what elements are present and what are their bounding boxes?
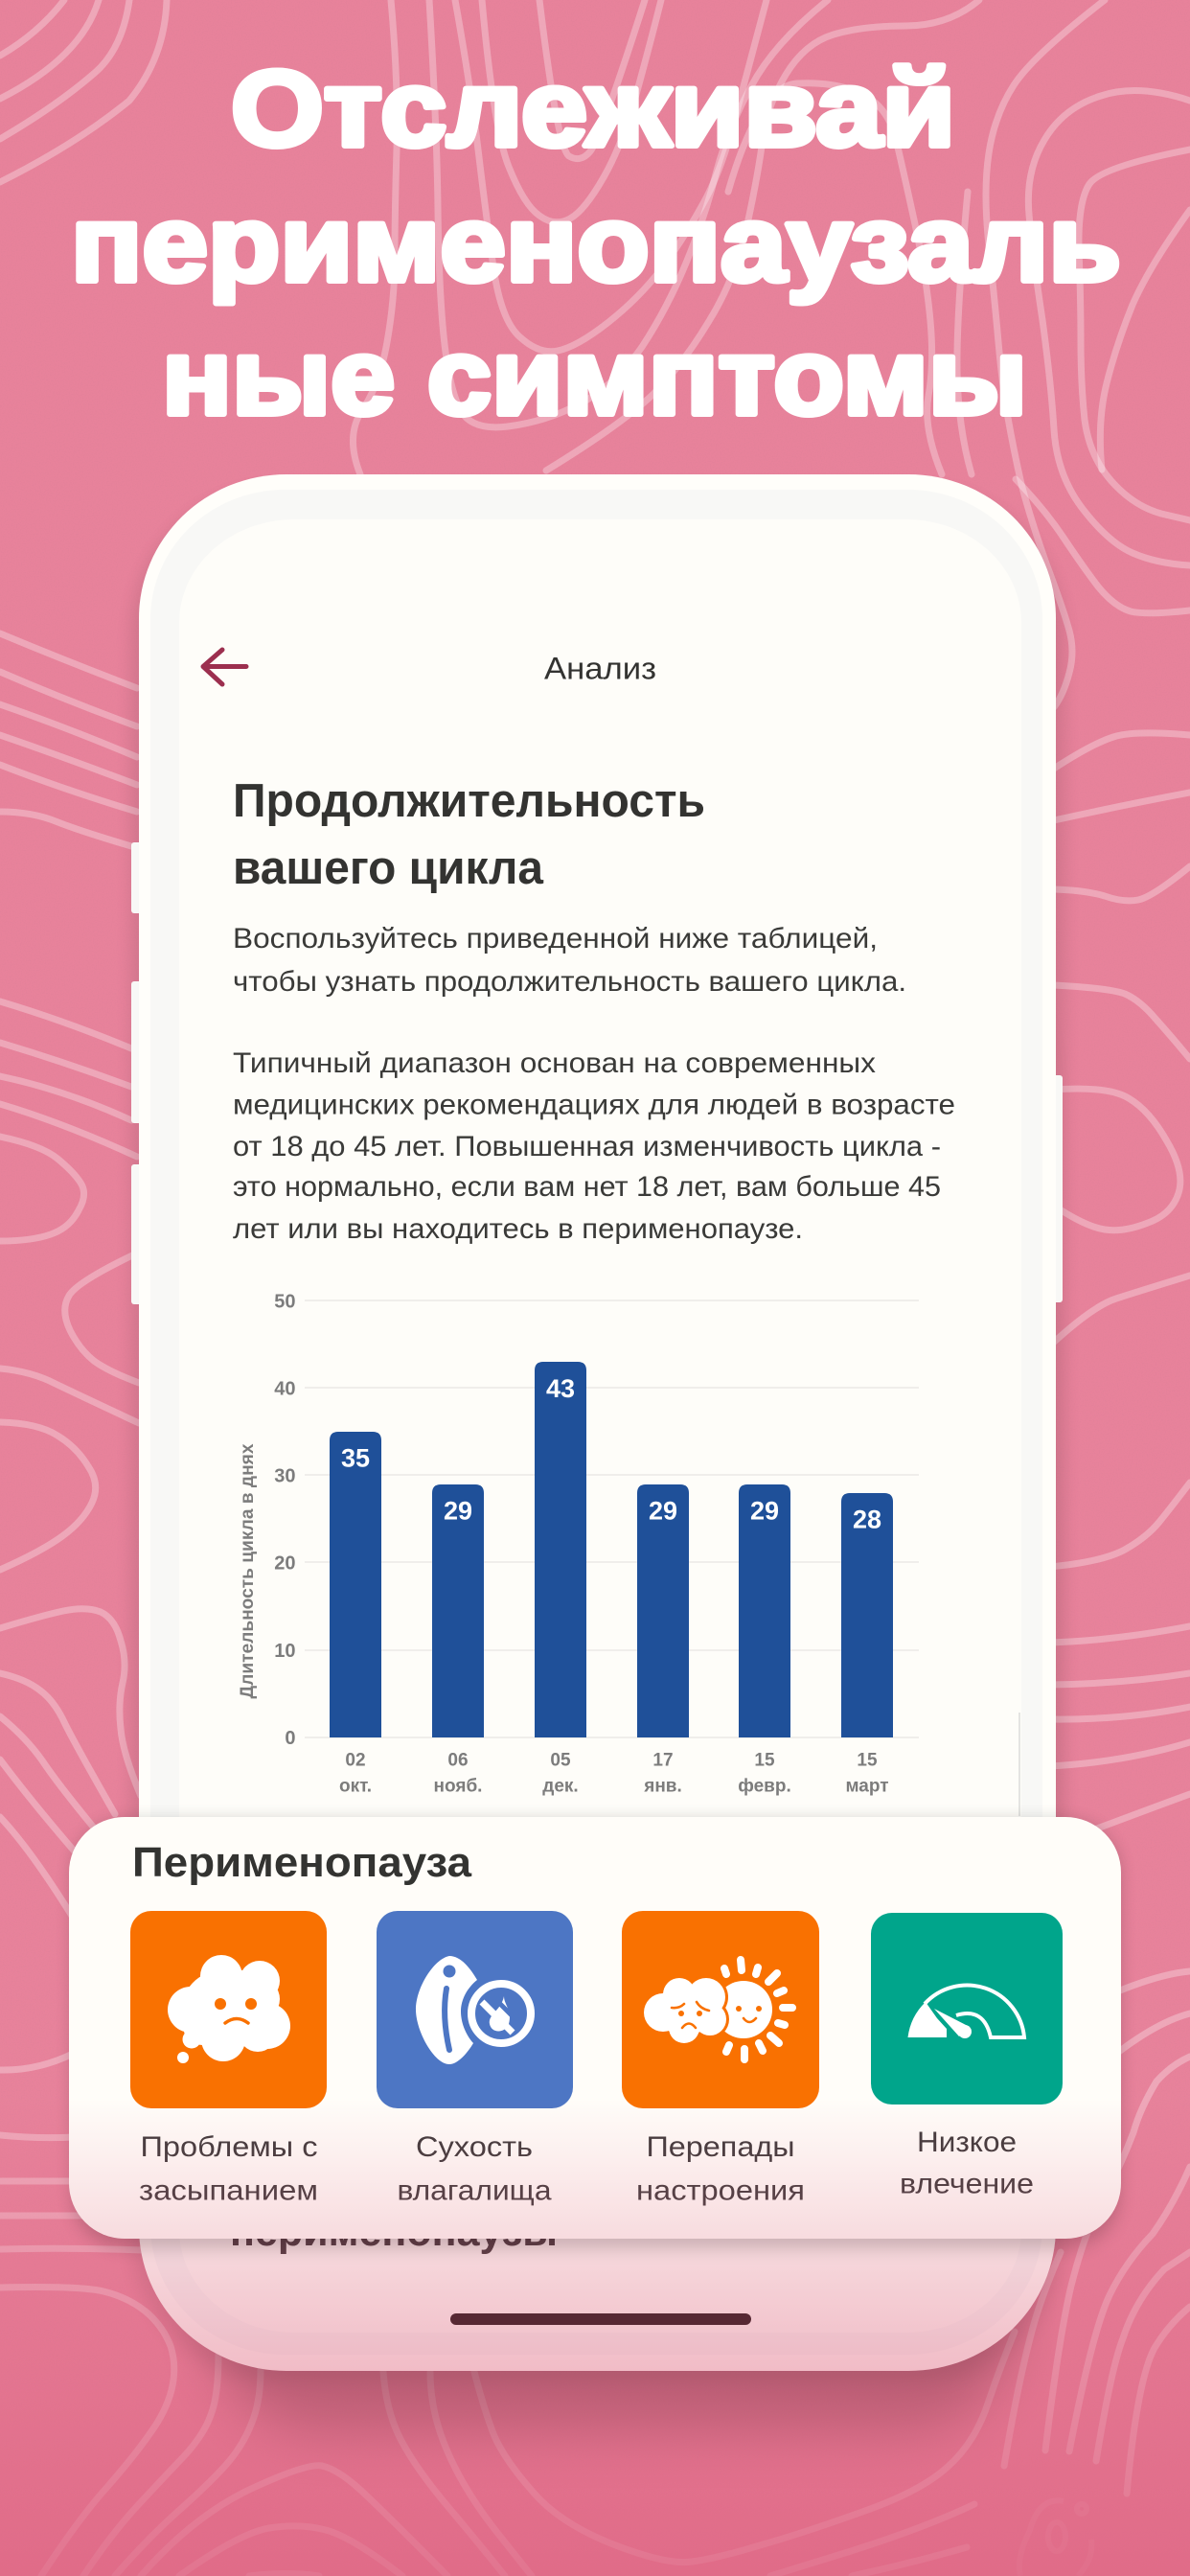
explanation paragraph: от 18 до 45 лет. Повышенная изменчивость цикла - xyxy=(233,1131,941,1162)
bar values: 29 xyxy=(750,1497,779,1526)
tile: vaginal dryness xyxy=(377,1911,573,2206)
explanation paragraph: медицинских рекомендациях для людей в возрасте xyxy=(233,1089,955,1121)
tile label xyxy=(900,2127,1034,2200)
y axis labels: 50 xyxy=(274,1292,295,1313)
y axis labels: 30 xyxy=(274,1466,295,1487)
screen heading xyxy=(233,775,705,894)
x axis labels: янв. xyxy=(643,1777,682,1796)
x axis labels: 15 xyxy=(754,1750,775,1771)
card shadow xyxy=(73,1821,1119,2248)
title xyxy=(71,49,1121,437)
tile label: засыпанием xyxy=(139,2175,318,2206)
tile label: влагалища xyxy=(397,2175,552,2206)
card heading: Перименопауза xyxy=(132,1839,472,1886)
bar values: 35 xyxy=(341,1443,370,1472)
icon: sad cloud xyxy=(168,1955,290,2063)
icon: gauge xyxy=(908,1986,1024,2038)
explanation paragraph xyxy=(233,1047,955,1245)
icon: back arrow xyxy=(203,650,246,684)
tile: mood swings xyxy=(622,1911,819,2206)
title: Отслеживай xyxy=(231,49,955,169)
y axis title: Длительность цикла в днях xyxy=(238,1443,258,1698)
y axis labels: 20 xyxy=(274,1552,295,1574)
watermark logo xyxy=(1019,2500,1091,2576)
bar values: 29 xyxy=(649,1497,677,1526)
x axis labels xyxy=(339,1750,889,1796)
phone inner bezel xyxy=(150,490,1042,2355)
x axis labels: 06 xyxy=(447,1750,469,1771)
tile label: Сухость xyxy=(416,2131,533,2163)
icon: cloud and sun xyxy=(644,1960,792,2059)
tile label: влечение xyxy=(900,2168,1034,2200)
screen heading: вашего цикла xyxy=(233,842,544,894)
side buttons xyxy=(131,842,1063,1304)
tile label: настроения xyxy=(636,2175,805,2206)
x axis labels: 15 xyxy=(857,1750,878,1771)
bar values: 28 xyxy=(853,1505,881,1533)
partly hidden heading: перименопаузы xyxy=(230,2208,558,2255)
tile label: Перепады xyxy=(646,2131,795,2163)
title: перименопаузаль xyxy=(71,184,1121,304)
x axis labels: март xyxy=(845,1777,889,1796)
bar chart: cycle length xyxy=(238,1292,919,1796)
bottom pink fade xyxy=(0,2099,1190,2576)
home indicator xyxy=(450,2313,751,2325)
y axis labels: 10 xyxy=(274,1641,295,1662)
explanation paragraph: это нормально, если вам нет 18 лет, вам больше 45 xyxy=(233,1171,941,1203)
bars xyxy=(330,1362,893,1737)
x axis labels: 17 xyxy=(652,1750,674,1771)
tile: low libido xyxy=(871,1913,1063,2200)
x axis labels: дек. xyxy=(542,1777,579,1796)
tile: sleep problems xyxy=(130,1911,327,2206)
x axis labels: окт. xyxy=(339,1777,372,1796)
tile label xyxy=(636,2131,805,2206)
x axis labels: нояб. xyxy=(434,1777,482,1796)
explanation paragraph: лет или вы находитесь в перименопаузе. xyxy=(233,1213,803,1245)
bar values: 43 xyxy=(546,1374,575,1403)
bar values xyxy=(341,1374,881,1533)
screen header: Анализ xyxy=(544,652,656,686)
intro paragraph: чтобы узнать продолжительность вашего цикла. xyxy=(233,966,906,998)
card background xyxy=(69,1817,1121,2239)
screen heading: Продолжительность xyxy=(233,775,705,827)
y axis labels: 40 xyxy=(274,1378,295,1399)
tile label xyxy=(139,2131,318,2206)
intro paragraph: Воспользуйтесь приведенной ниже таблицей, xyxy=(233,923,878,954)
x axis labels: 02 xyxy=(345,1750,366,1771)
tile label: Низкое xyxy=(917,2127,1017,2158)
icon: crossed droplet xyxy=(416,1956,531,2064)
phone outer frame xyxy=(139,474,1056,2371)
bar values: 29 xyxy=(444,1497,472,1526)
title: ные симптомы xyxy=(162,317,1027,437)
intro paragraph xyxy=(233,923,906,998)
panel: perimenopause symptoms xyxy=(69,1817,1121,2239)
phone shadow xyxy=(132,489,1064,2434)
x axis labels: 05 xyxy=(550,1750,571,1771)
explanation paragraph: Типичный диапазон основан на современных xyxy=(233,1047,876,1079)
y axis labels: 0 xyxy=(285,1728,295,1749)
tile label xyxy=(397,2131,552,2206)
y axis labels xyxy=(274,1292,295,1749)
x axis labels: февр. xyxy=(738,1777,791,1796)
phone mockup xyxy=(131,474,1063,2371)
tile label: Проблемы с xyxy=(140,2131,318,2163)
phone screen xyxy=(179,519,1021,2333)
